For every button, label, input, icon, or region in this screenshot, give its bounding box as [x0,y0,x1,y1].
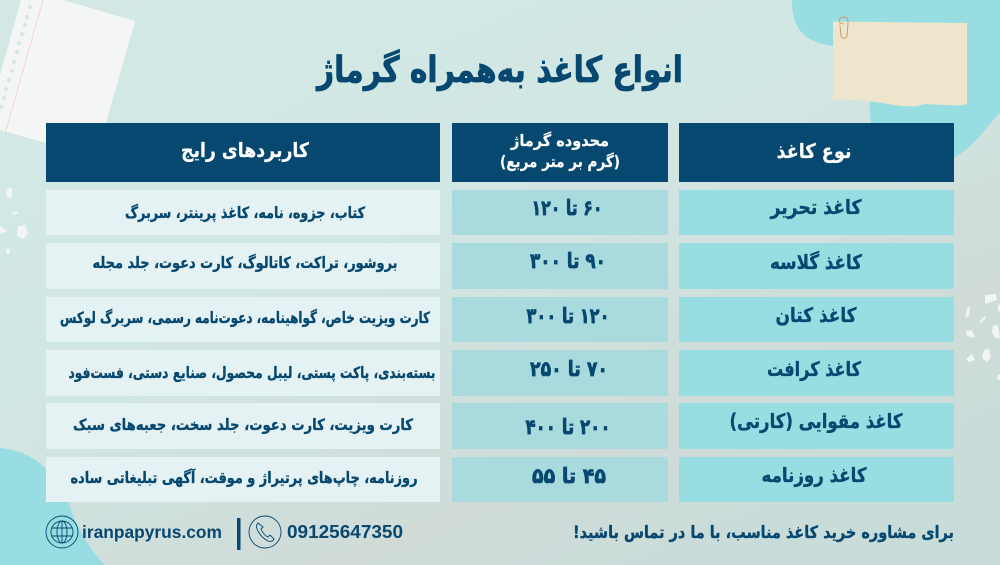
row 2: کاغذ گلاسه [770,250,862,274]
row 4: کاغذ کرافت [767,357,861,381]
title: انواع کاغذ به‌همراه گرماژ [315,49,683,91]
row 6 [46,457,954,502]
row 2: بروشور، تراکت، کاتالوگ، کارت دعوت، جلد مجله [92,254,398,272]
icon: phone [249,516,281,548]
row 5: ۲۰۰ تا ۴۰۰ [526,415,610,439]
background blob: top right [792,0,1000,160]
row 4: ۷۰ تا ۲۵۰ [530,357,608,381]
decoration: torn note with paperclip [833,17,967,106]
row 4 [46,350,954,396]
row 5 [46,403,954,449]
table header: weight range: محدوده گرماژ [510,131,609,150]
table header: weight range: (گرم بر متر مربع) [500,152,620,171]
row 6: کاغذ روزنامه [762,463,867,487]
row 4: بسته‌بندی، پاکت پستی، لیبل محصول، صنایع دستی، فست‌فود [68,364,436,383]
divider bar [237,518,240,550]
table header: uses: کاربردهای رایج [181,138,309,162]
table header: weight range [452,123,668,182]
decoration: left confetti [0,188,28,254]
row 3: کارت ویزیت خاص، گواهینامه، دعوت‌نامه رسمی، سربرگ لوکس [60,308,431,327]
row 1: ۶۰ تا ۱۲۰ [532,196,602,220]
row 5: کارت ویزیت، کارت دعوت، جلد سخت، جعبه‌های سبک [73,416,414,434]
phone number: 09125647350 [287,522,403,542]
table header: paper type: نوع کاغذ [776,139,852,163]
row 3: ۱۲۰ تا ۳۰۰ [526,304,610,328]
icon: globe [46,516,78,548]
website: iranpapyrus.com [82,522,222,542]
row 1: کاغذ تحریر [770,195,862,219]
row 2: ۹۰ تا ۳۰۰ [530,249,606,273]
row 1 [46,190,954,235]
decoration: right confetti [965,294,1000,380]
row 6: ۴۵ تا ۵۵ [532,464,606,488]
row 6: روزنامه، چاپ‌های پرتیراژ و موقت، آگهی تبلیغاتی ساده [70,468,418,488]
background blob: bottom left [0,448,105,565]
row 1: کتاب، جزوه، نامه، کاغذ پرینتر، سربرگ [125,204,366,223]
row 5: کاغذ مقوایی (کارتی) [730,409,903,433]
table header: uses [46,123,440,182]
table header: paper type [679,123,954,182]
row 3: کاغذ کتان [776,303,857,327]
row 3 [46,297,954,342]
row 2 [46,243,954,289]
decoration: notebook paper [0,0,135,143]
